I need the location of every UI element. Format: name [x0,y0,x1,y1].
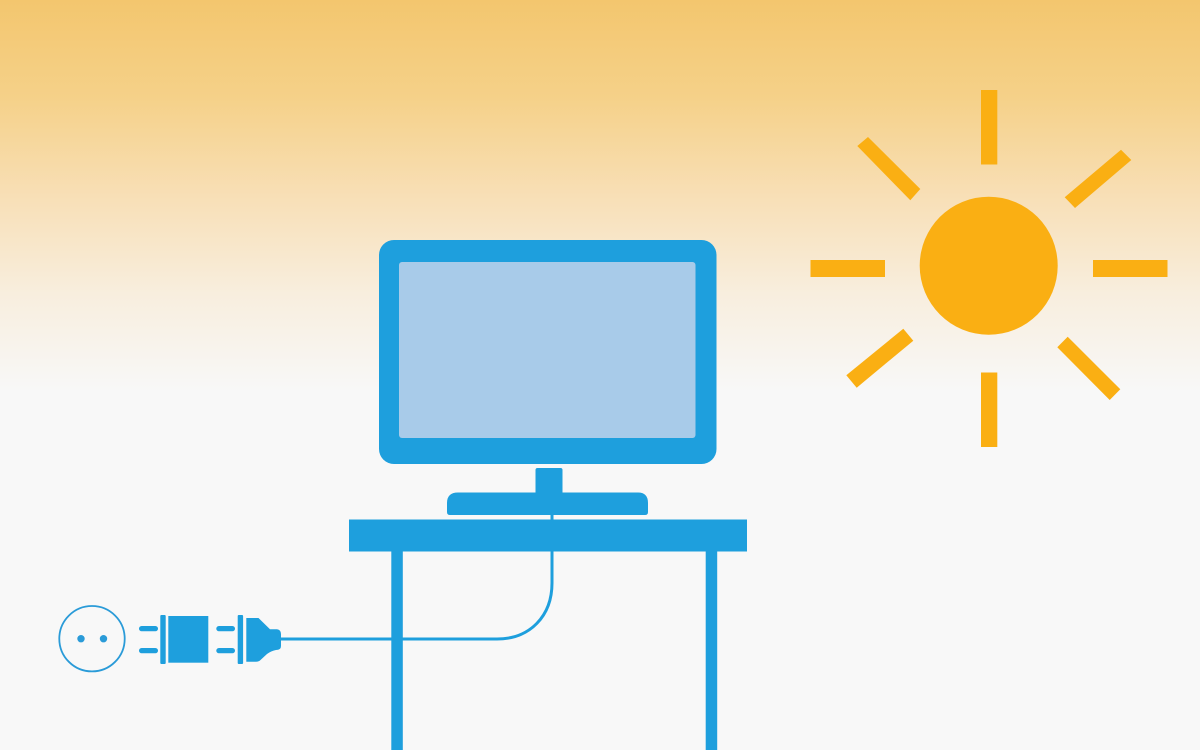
power cable [278,512,552,639]
table [349,520,747,750]
icon: adapter [139,615,208,664]
icon: power plug [216,615,281,664]
monitor stand [447,468,648,515]
icon: sun [810,90,1168,447]
monitor frame [379,240,716,464]
monitor screen [399,262,696,438]
icon: wall socket [59,606,125,671]
monitor [379,240,716,515]
